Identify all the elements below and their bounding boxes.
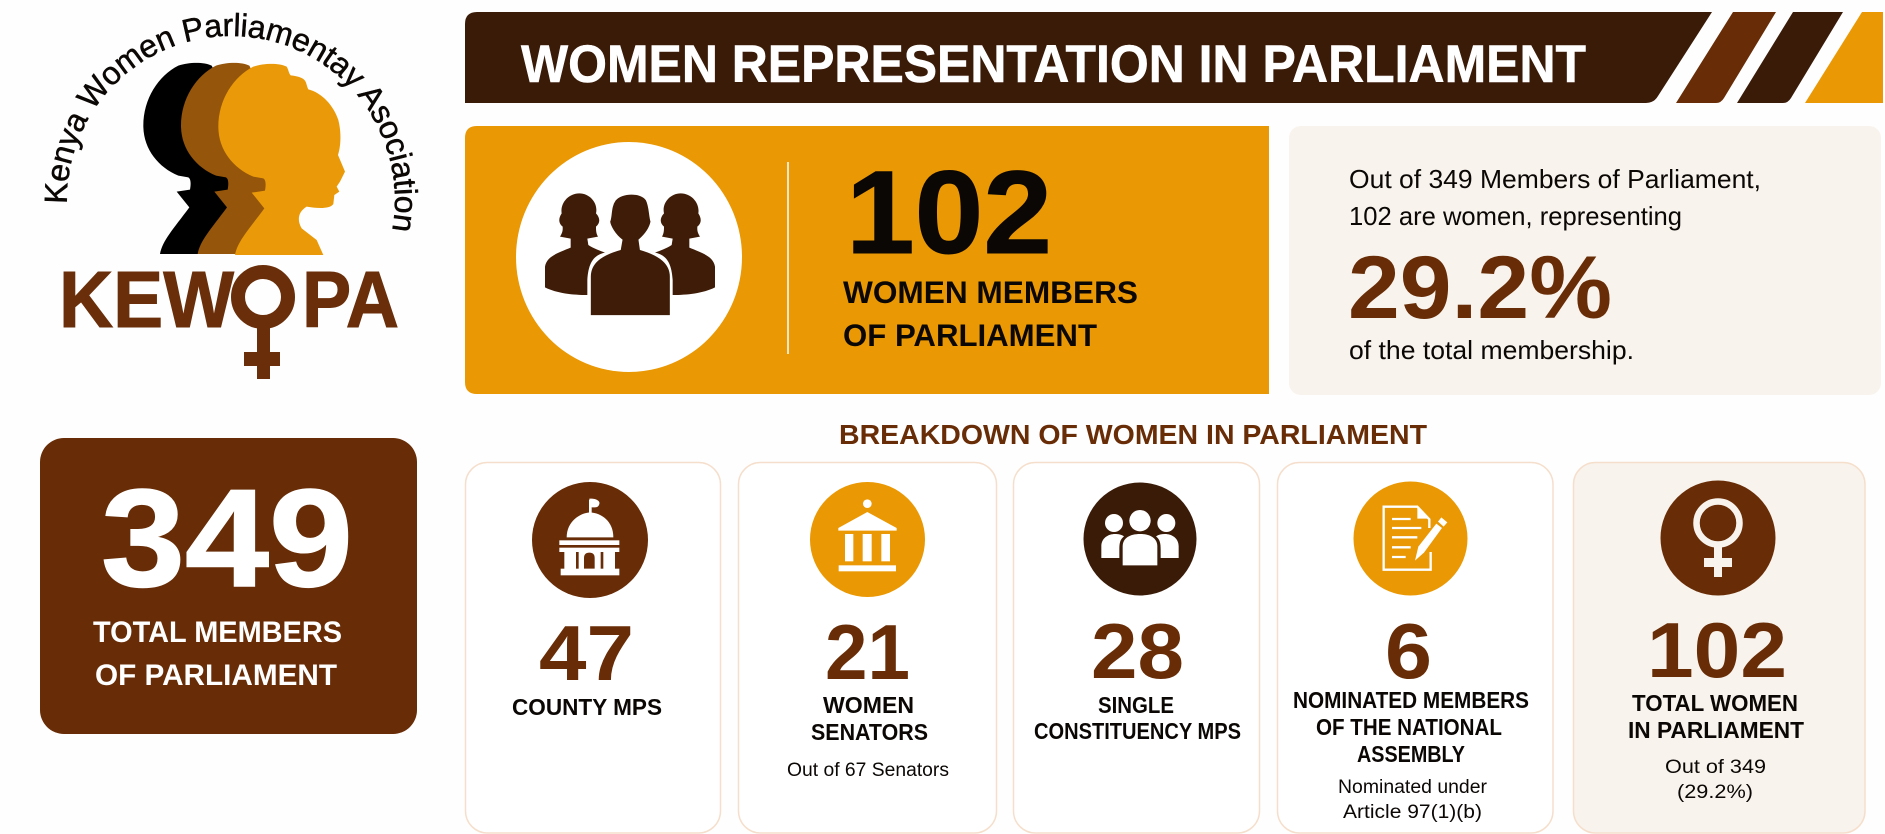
explanation text — [1349, 164, 1761, 231]
icon: female symbol — [1660, 480, 1776, 596]
note: nominated under article: Nominated under — [1338, 777, 1488, 798]
panel: percentage explanation — [1289, 126, 1881, 395]
label: total women in parliament — [1628, 690, 1804, 743]
card: single constituency MPs — [1014, 462, 1260, 833]
label: nominated members of the national assembly: ASSEMBLY — [1357, 741, 1465, 767]
logo wordmark: PA — [302, 255, 399, 344]
title text: WOMEN REPRESENTATION IN PARLIAMENT — [521, 35, 1586, 94]
card: total women in parliament — [1574, 462, 1865, 833]
label: women members of parliament: WOMEN MEMBERS — [843, 274, 1138, 310]
label: women members of parliament: OF PARLIAMENT — [843, 317, 1097, 353]
logo wordmark: KEW — [59, 255, 234, 344]
label: women members of parliament — [843, 274, 1138, 353]
panel: 349 total members — [40, 438, 417, 734]
card: county MPs — [466, 462, 720, 833]
logo wordmark — [59, 255, 399, 379]
icon: group of people — [1084, 482, 1196, 596]
label: nominated members of the national assembly: NOMINATED MEMBERS — [1293, 687, 1529, 713]
icon: three women — [516, 142, 742, 372]
label: total members of parliament — [93, 616, 342, 692]
label: total women in parliament: TOTAL WOMEN — [1632, 690, 1798, 716]
logo silhouettes — [143, 63, 345, 255]
number 28: 28 — [1091, 607, 1184, 695]
explanation text: 102 are women, representing — [1349, 201, 1682, 231]
note: nominated under article — [1338, 777, 1488, 823]
closing text: of the total membership. — [1349, 335, 1634, 365]
note: out of 349 — [1665, 757, 1766, 803]
logo: KEWOPA — [44, 12, 418, 379]
icon: institution building — [810, 482, 925, 597]
number 47: 47 — [539, 609, 634, 697]
big number 349: 349 — [101, 461, 353, 616]
label: single constituency MPs: CONSTITUENCY MPS — [1034, 718, 1241, 744]
explanation text: Out of 349 Members of Parliament, — [1349, 164, 1761, 194]
icon: document and pencil — [1354, 482, 1468, 596]
percentage 29.2%: 29.2% — [1348, 237, 1612, 337]
logo arc text: Kenya Women Parliamentay Asociation — [44, 12, 418, 230]
number 6: 6 — [1385, 607, 1432, 695]
note: nominated under article: Article 97(1)(b) — [1343, 802, 1482, 823]
label: women senators: WOMEN — [823, 692, 914, 718]
card: women senators — [738, 462, 996, 833]
label: single constituency MPs: SINGLE — [1098, 692, 1174, 718]
label: total women in parliament: IN PARLIAMENT — [1628, 717, 1804, 743]
label: total members of parliament: OF PARLIAMENT — [95, 659, 337, 692]
note: out of 349: Out of 349 — [1665, 757, 1766, 778]
note: out of 349: (29.2%) — [1677, 782, 1753, 803]
title banner — [465, 12, 1883, 103]
note: out of 67 senators: Out of 67 Senators — [787, 760, 949, 781]
number 102: 102 — [1647, 606, 1787, 694]
banner stripes — [1676, 12, 1883, 103]
label: county MPs: COUNTY MPS — [512, 694, 662, 720]
panel divider — [787, 162, 789, 354]
label: nominated members of the national assembly — [1293, 687, 1529, 767]
label: nominated members of the national assembly: OF THE NATIONAL — [1316, 714, 1502, 740]
number 21: 21 — [825, 608, 910, 696]
panel: 102 women members — [465, 126, 1269, 394]
card: nominated members — [1278, 462, 1553, 833]
label: total members of parliament: TOTAL MEMBERS — [93, 616, 342, 649]
icon: parliament dome — [532, 482, 648, 598]
label: women senators: SENATORS — [811, 719, 928, 745]
label: single constituency MPs — [1034, 692, 1241, 744]
label: women senators — [811, 692, 928, 745]
big number 102: 102 — [846, 147, 1052, 279]
heading: breakdown: BREAKDOWN OF WOMEN IN PARLIAMENT — [839, 419, 1427, 450]
